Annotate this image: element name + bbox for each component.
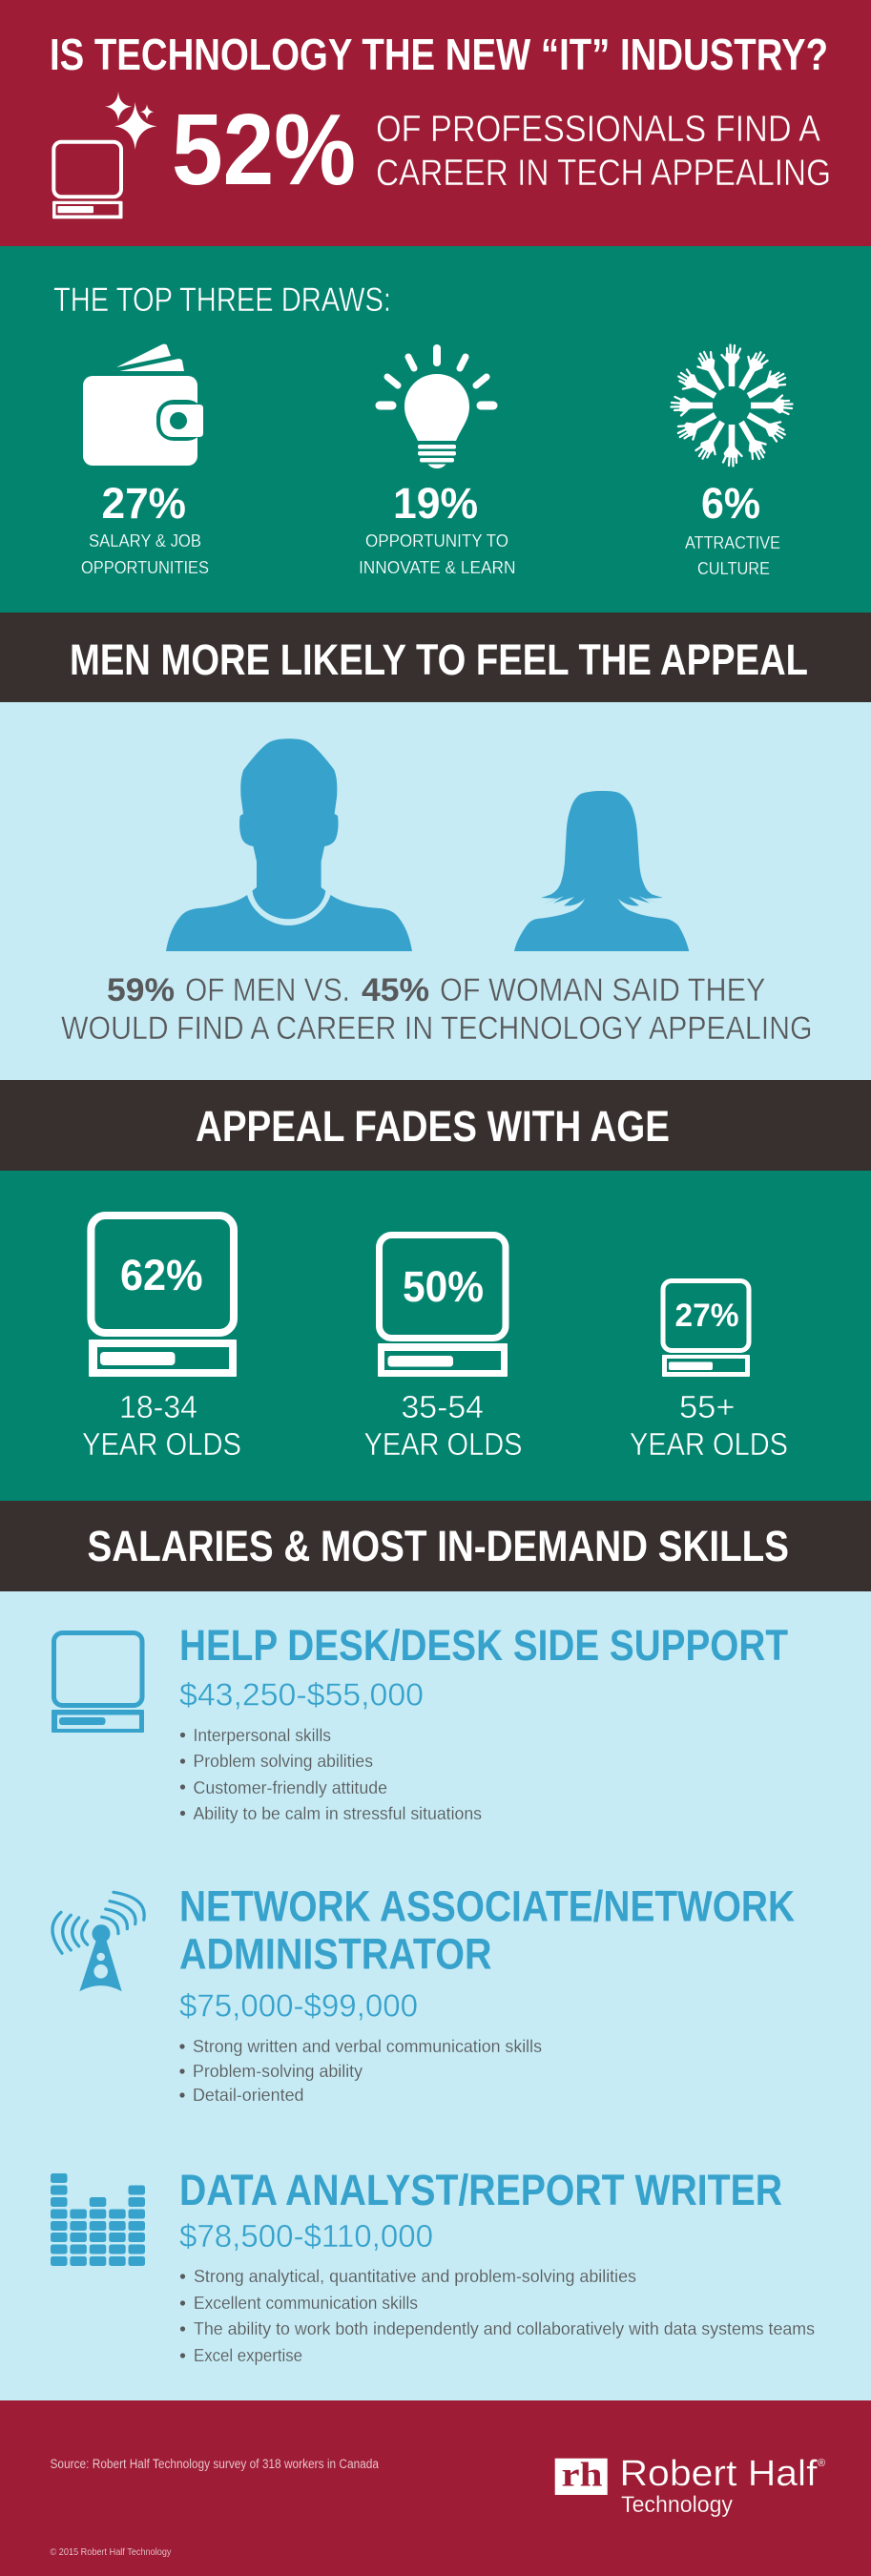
skills list: Customer-friendly attitude — [193, 1778, 387, 1797]
job title — [179, 1881, 795, 1979]
skills list: Excellent communication skills — [194, 2294, 418, 2313]
age group 55+: YEAR OLDS — [630, 1426, 788, 1462]
age group 55+: 55+ — [679, 1389, 735, 1424]
stat description: OF PROFESSIONALS FIND A — [376, 109, 820, 150]
icon: circle of hands — [672, 345, 792, 466]
skills list — [179, 2037, 542, 2105]
panel: men heading band — [0, 613, 871, 702]
logo: Robert Half Technology: ® — [818, 2458, 825, 2469]
skills list: Interpersonal skills — [193, 1726, 331, 1745]
stat: salary and job opportunities — [81, 479, 209, 577]
icon: signal tower — [52, 1892, 144, 1991]
salary: $75,000-$99,000 — [179, 1988, 418, 2023]
skills list — [180, 2267, 815, 2365]
panel: footer — [0, 2400, 871, 2576]
icon: woman silhouette — [514, 791, 689, 951]
age group 18-34: 18-34 — [119, 1389, 197, 1424]
salary: $78,500-$110,000 — [179, 2218, 433, 2254]
skills list: Detail-oriented — [193, 2086, 303, 2105]
skills list — [180, 1726, 482, 1823]
panel: gender comparison — [0, 702, 871, 1080]
gender stat text: OF WOMAN SAID THEY — [440, 972, 765, 1008]
panel: skills heading band — [0, 1501, 871, 1591]
icon: sparkling computer — [52, 92, 156, 218]
icon: wallet — [83, 344, 204, 466]
gender stat text: 45% — [362, 972, 429, 1008]
skills list: Problem-solving ability — [193, 2062, 363, 2081]
gender stat text: OF MEN VS. — [185, 972, 350, 1008]
age group 55+ — [630, 1280, 788, 1462]
gender stat text: 59% — [107, 972, 175, 1008]
stat: salary and job opportunities: SALARY & JOB — [89, 531, 201, 551]
stat: attractive culture: 6% — [701, 479, 760, 528]
source note: Source: Robert Half Technology survey of 318 workers in Canada — [50, 2457, 379, 2471]
stat: attractive culture — [685, 479, 780, 578]
salary: $43,250-$55,000 — [179, 1677, 424, 1712]
heading: APPEAL FADES WITH AGE — [196, 1102, 670, 1151]
skills list: The ability to work both independently and collaboratively with data systems teams — [194, 2319, 815, 2338]
panel: appeal by age — [0, 1171, 871, 1501]
age group 55+: 27% — [675, 1298, 738, 1334]
panel: header — [0, 0, 871, 246]
logo: Robert Half Technology: Robert Half — [620, 2454, 818, 2494]
stat: opportunity to innovate and learn — [359, 479, 515, 577]
job: help desk — [52, 1621, 788, 1823]
panel: salaries and skills — [0, 1591, 871, 2400]
skills list: Excel expertise — [194, 2346, 302, 2365]
age group 35-54: 50% — [403, 1262, 484, 1311]
job: data analyst — [51, 2166, 815, 2365]
logo: Robert Half Technology: Technology — [621, 2492, 733, 2518]
stat: attractive culture: ATTRACTIVE — [685, 533, 780, 552]
icon: computer — [52, 1633, 144, 1733]
age group 35-54: YEAR OLDS — [364, 1426, 523, 1462]
stat: salary and job opportunities: OPPORTUNITIES — [81, 558, 209, 577]
skills list: Problem solving abilities — [193, 1752, 373, 1771]
skills list: Ability to be calm in stressful situations — [193, 1804, 482, 1823]
age group 18-34: 62% — [120, 1251, 202, 1299]
stat: opportunity to innovate and learn: INNOVATE & LEARN — [359, 558, 515, 577]
age group 18-34 — [82, 1215, 241, 1462]
copyright: © 2015 Robert Half Technology — [50, 2546, 172, 2558]
logo: Robert Half Technology: rh — [561, 2456, 603, 2494]
icon: bar blocks — [51, 2173, 145, 2266]
age group 35-54 — [364, 1235, 523, 1462]
age group 35-54: 35-54 — [401, 1389, 484, 1424]
skills list: Strong written and verbal communication skills — [193, 2037, 542, 2056]
icon: man silhouette — [166, 738, 412, 951]
gender stat text — [61, 972, 813, 1047]
skills list: Strong analytical, quantitative and problem-solving abilities — [194, 2267, 636, 2286]
big stat: 52%: 52% — [172, 93, 356, 206]
heading: THE TOP THREE DRAWS: — [53, 281, 391, 319]
job: network associate — [52, 1881, 795, 2105]
stat: salary and job opportunities: 27% — [101, 479, 186, 528]
job title: DATA ANALYST/REPORT WRITER — [179, 2166, 782, 2214]
age group 18-34: YEAR OLDS — [82, 1426, 241, 1462]
stat: opportunity to innovate and learn: 19% — [393, 479, 478, 528]
stat: attractive culture: CULTURE — [697, 559, 770, 578]
panel: age heading band — [0, 1080, 871, 1171]
stat description — [376, 109, 831, 194]
stat: opportunity to innovate and learn: OPPORTUNITY TO — [365, 531, 508, 551]
job title: HELP DESK/DESK SIDE SUPPORT — [179, 1621, 788, 1670]
job title: ADMINISTRATOR — [179, 1929, 492, 1979]
logo: Robert Half Technology — [555, 2454, 825, 2518]
icon: light bulb — [380, 348, 493, 468]
panel: top three draws — [0, 246, 871, 613]
